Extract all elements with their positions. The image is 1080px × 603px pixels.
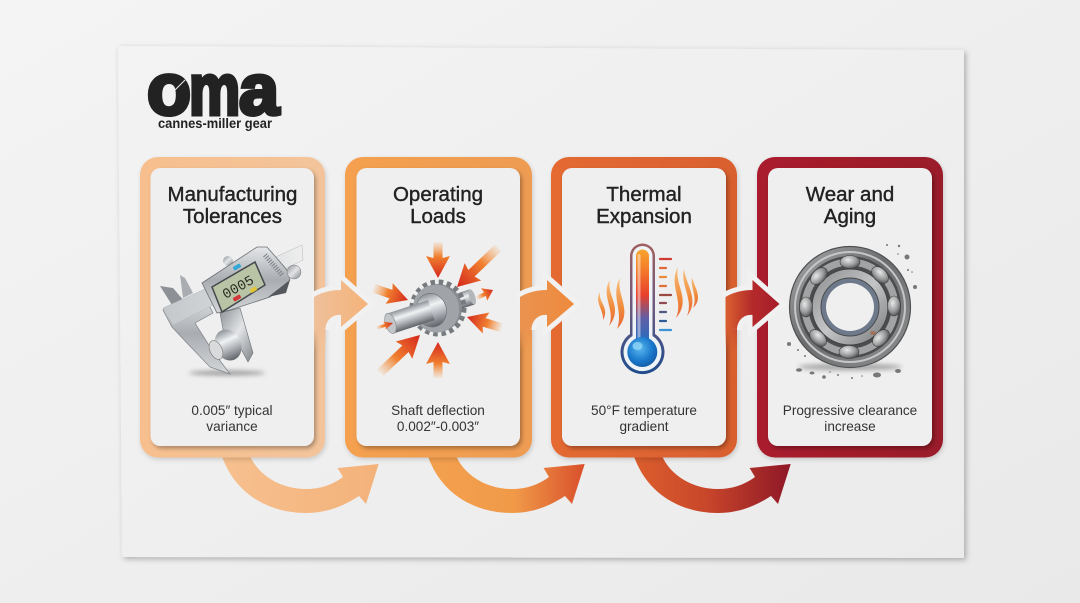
heading: wear and aging: Aging xyxy=(824,205,876,228)
caption: 0.005 typical variance: variance xyxy=(206,419,258,434)
logo: oma cannes-miller gear: m xyxy=(189,49,240,130)
heading: manufacturing tolerances: Manufacturing xyxy=(168,183,297,206)
heading: wear and aging: Wear and xyxy=(806,183,894,206)
caliper readout: 0005 xyxy=(220,273,257,303)
arrow: bottom curve 1 xyxy=(222,455,379,513)
arrow: connector 3 xyxy=(724,280,780,352)
caption: progressive clearance increase: Progressive clearance xyxy=(783,403,917,418)
caption: 0.005 typical variance: 0.005″ typical xyxy=(191,403,273,418)
panel: thermal expansion xyxy=(551,157,737,458)
arrow: bottom curve 3 xyxy=(634,455,791,513)
icon: worn ball bearing xyxy=(787,244,917,379)
arrow: bottom curve 2 xyxy=(428,455,585,513)
caption: shaft deflection: Shaft deflection xyxy=(391,403,485,418)
heading: operating loads: Operating xyxy=(393,183,483,206)
heading: manufacturing tolerances: Tolerances xyxy=(183,205,282,228)
arrow: connector 2 xyxy=(518,280,574,352)
logo: oma cannes-miller gear: a xyxy=(239,50,280,130)
heading: thermal expansion: Thermal xyxy=(606,183,682,206)
heading: thermal expansion: Expansion xyxy=(596,205,692,228)
heading: operating loads: Loads xyxy=(410,205,466,228)
panel: paper sheet xyxy=(118,46,964,558)
caption: temperature gradient: 50°F temperature xyxy=(591,403,697,418)
logo: oma cannes-miller gear: cannes-miller gear xyxy=(158,115,272,131)
panel: wear and aging xyxy=(757,157,943,458)
logo: oma cannes-miller gear xyxy=(147,49,280,131)
panel: operating loads xyxy=(345,157,532,458)
logo: oma cannes-miller gear: o xyxy=(147,50,191,130)
caption: progressive clearance increase: increase xyxy=(824,419,876,434)
icon: thermometer with heat waves xyxy=(598,244,698,374)
icon: digital caliper xyxy=(160,245,303,376)
caption: shaft deflection: 0.002″-0.003″ xyxy=(397,419,479,434)
arrow: connector 1 xyxy=(312,280,368,352)
caption: temperature gradient: gradient xyxy=(619,419,669,434)
panel: manufacturing tolerances xyxy=(140,157,325,458)
icon: gear and shaft under loads xyxy=(370,239,507,382)
